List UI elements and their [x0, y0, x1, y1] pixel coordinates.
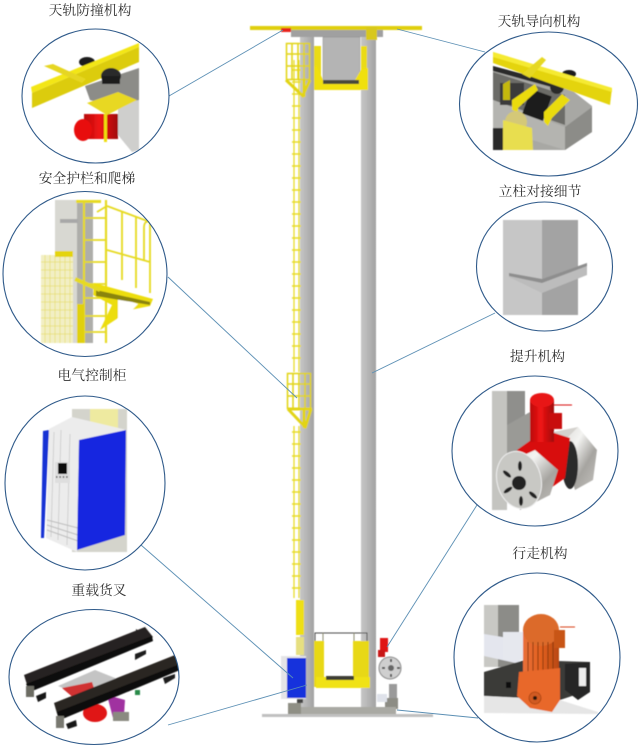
detail: rail buffer [31, 43, 139, 152]
circle: travel mechanism [454, 573, 620, 742]
detail: heavy-duty fork [24, 627, 180, 729]
label: 天轨防撞机构: 天轨防撞机构 [49, 2, 132, 18]
circle: guardrail and ladder [3, 192, 167, 356]
rail guide block [366, 27, 377, 40]
leader lines [141, 29, 495, 725]
label: 安全护栏和爬梯: 安全护栏和爬梯 [39, 170, 135, 186]
circle: column joint [476, 202, 612, 331]
rail buffer [281, 28, 291, 32]
left column [300, 36, 314, 708]
main stacker crane [250, 26, 433, 717]
circle: heavy-duty fork [9, 610, 179, 744]
detail: guardrail and ladder [41, 200, 153, 343]
circle: hoist mechanism [452, 376, 618, 526]
floor rail [262, 714, 433, 717]
circle: rail buffer [22, 29, 169, 163]
right column [361, 36, 376, 708]
top crossbeam [291, 30, 383, 37]
control cabinet [281, 656, 306, 703]
label: 天轨导向机构: 天轨导向机构 [498, 13, 581, 29]
bottom carriage [314, 633, 370, 688]
label: 立柱对接细节: 立柱对接细节 [499, 183, 582, 199]
detail: travel mechanism [484, 605, 598, 714]
label: 提升机构: 提升机构 [510, 348, 565, 364]
label: 电气控制柜: 电气控制柜 [58, 367, 127, 383]
label: 重载货叉: 重载货叉 [71, 582, 127, 598]
detail: rail guide [493, 52, 612, 150]
label: 行走机构: 行走机构 [512, 545, 568, 561]
circle: control cabinet [5, 396, 165, 570]
yellow covers [296, 600, 304, 635]
ceiling rail [250, 26, 422, 30]
detail: control cabinet [41, 409, 127, 552]
base beam [290, 707, 396, 715]
upper safety platform [286, 44, 310, 97]
lift motor [378, 638, 401, 679]
circle: rail guide [460, 32, 638, 176]
detail: hoist mechanism [490, 391, 597, 514]
ladder [292, 60, 301, 598]
top carriage [314, 37, 368, 90]
lower safety platform [287, 374, 312, 428]
travel motor [377, 684, 398, 709]
detail: column joint [503, 220, 587, 315]
